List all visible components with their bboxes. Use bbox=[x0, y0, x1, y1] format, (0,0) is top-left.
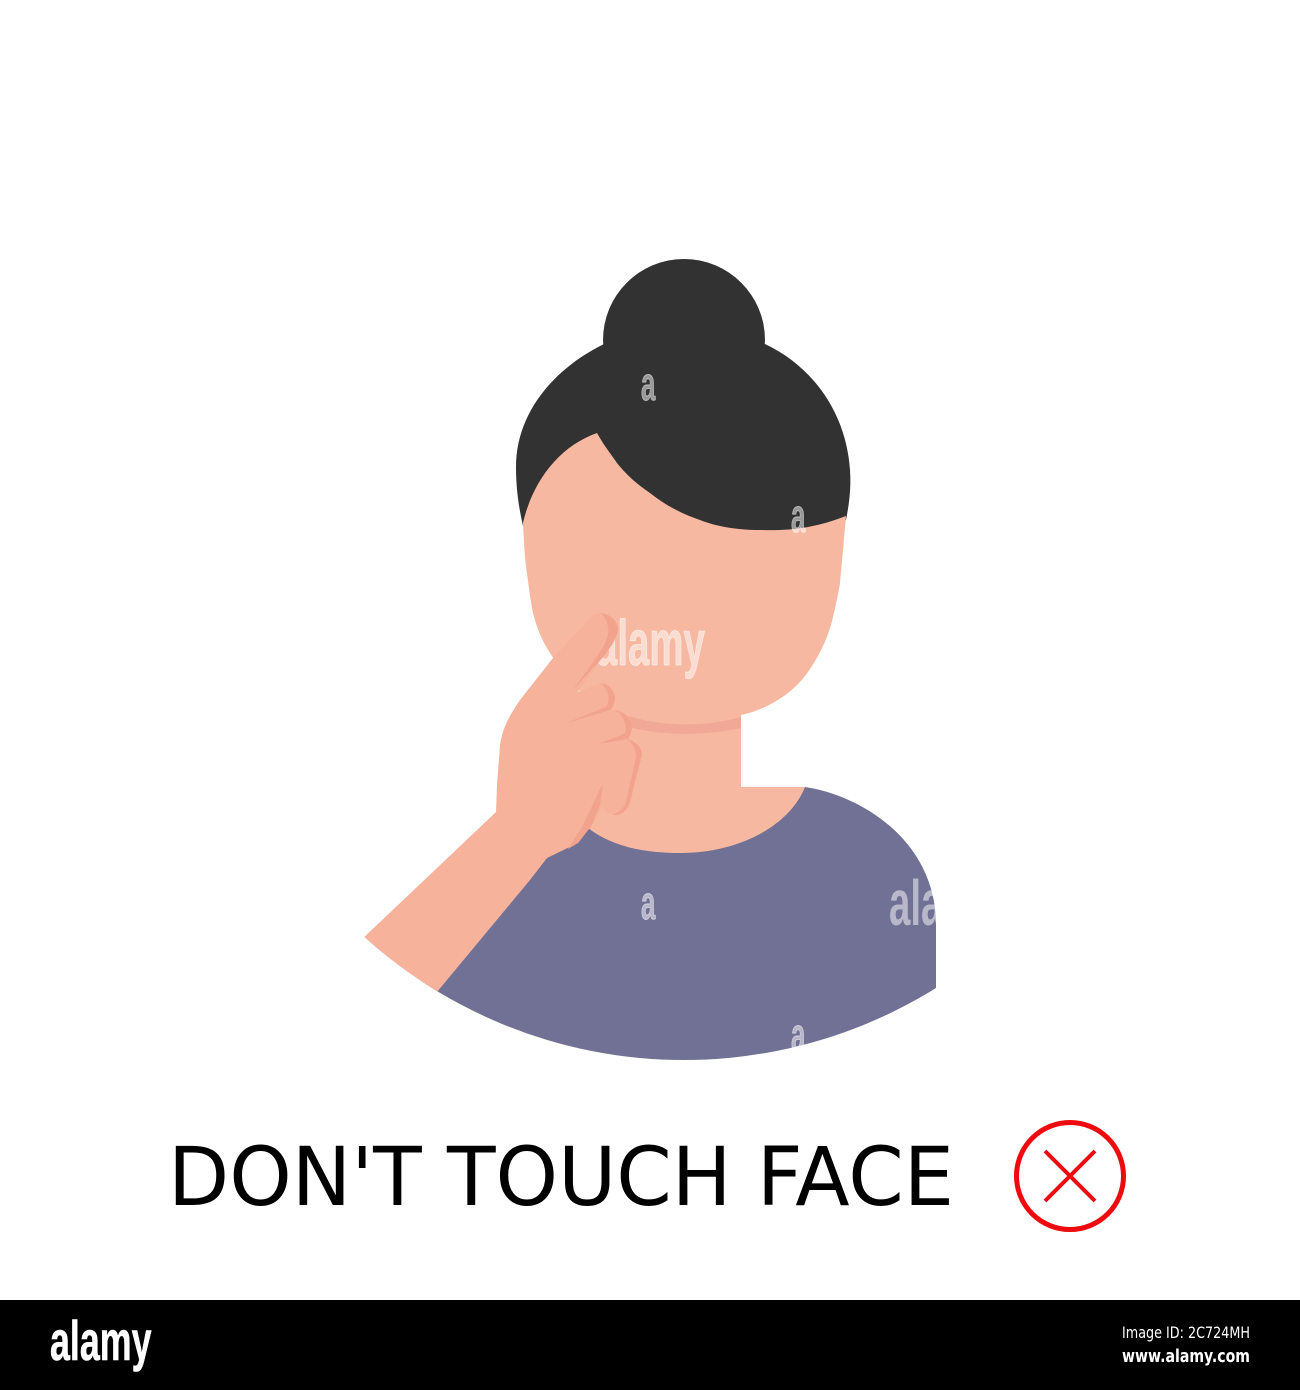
neck bbox=[585, 690, 830, 880]
watermark: central logo: alamy bbox=[596, 608, 705, 680]
index finger shadow bbox=[573, 613, 618, 690]
image id: Image ID: 2C724MH bbox=[1122, 1323, 1250, 1342]
face bbox=[523, 433, 846, 725]
watermark: shirt hem: a bbox=[791, 1010, 806, 1062]
watermark: hair: a bbox=[641, 359, 656, 411]
watermark: shirt right: alamy bbox=[889, 868, 998, 940]
palm crease bbox=[568, 783, 603, 849]
watermark: fringe: a bbox=[791, 491, 806, 543]
middle finger shadow bbox=[567, 683, 615, 723]
watermark: shirt: a bbox=[641, 878, 656, 930]
arm and hand bbox=[364, 613, 642, 992]
neck crease bbox=[628, 716, 741, 734]
watermarks bbox=[596, 359, 806, 1062]
shirt bbox=[422, 787, 936, 1060]
website: www.alamy.com bbox=[1122, 1346, 1250, 1367]
heading: DON'T TOUCH FACE bbox=[168, 1131, 954, 1225]
icon: red cross in circle bbox=[1016, 1122, 1124, 1230]
footer bar bbox=[0, 1300, 1300, 1390]
ring finger shadow bbox=[598, 710, 632, 744]
little finger shadow bbox=[612, 739, 642, 815]
illustration: woman touching face bbox=[364, 259, 936, 1060]
hair bun bbox=[603, 259, 765, 421]
hair back bbox=[516, 330, 850, 560]
footer logo: alamy bbox=[50, 1309, 152, 1372]
arm bbox=[364, 630, 618, 992]
